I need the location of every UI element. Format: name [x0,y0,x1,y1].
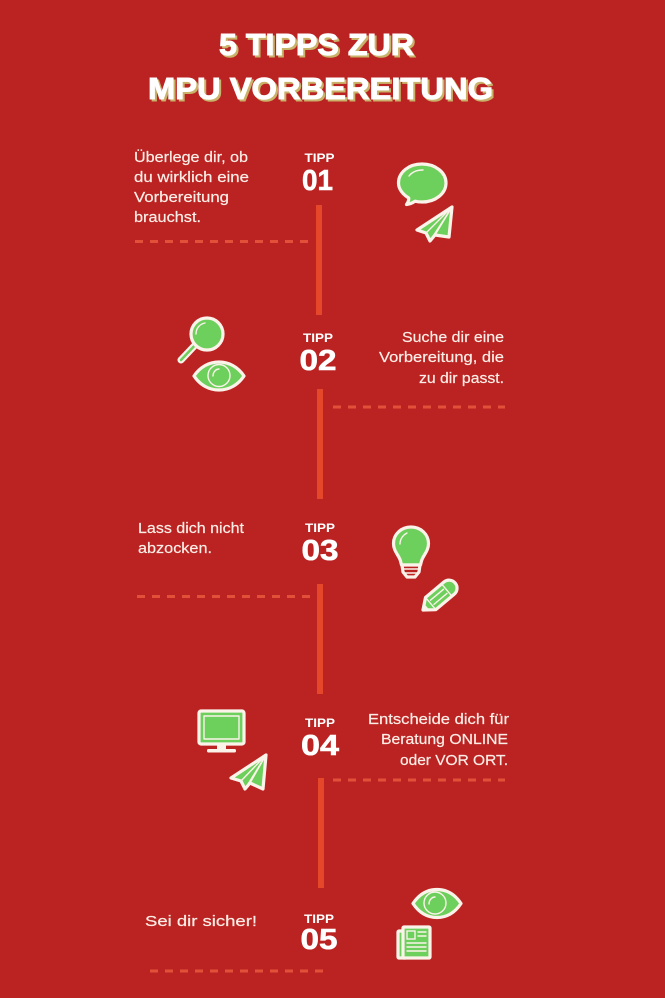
icon: newspaper [398,927,430,958]
text: tip 3: Lass dich nicht [138,520,245,537]
text: tip 5: Sei dir sicher! [145,913,257,930]
timeline segment 3 [317,584,323,694]
text: tip 2: Vorbereitung, die [379,349,504,366]
icon: pencil [418,577,460,616]
text: tip 3 [138,520,245,557]
dashed divider 2 [333,406,505,408]
title: 5 TIPPS ZUR [221,29,416,64]
label: tipp 03: 03 [302,535,338,567]
label: tipp 05: TIPP [304,912,334,926]
timeline segment 2 [317,389,323,499]
icon: eye [194,362,244,390]
dashed divider 4 [333,778,505,782]
text: tip 1 [134,148,249,226]
text: tip 4 [368,711,509,769]
title: MPU VORBEREITUNG [148,71,493,106]
timeline segment 1 [316,205,322,315]
text: tip 1: Überlege dir, ob [134,148,248,166]
text: tip 4: Entscheide dich für [368,711,509,728]
text: tip 1: Vorbereitung [134,189,229,206]
text: tip 2: Suche dir eine [402,329,504,346]
dashed divider 3 [137,595,310,598]
icon: monitor [199,711,244,752]
title: 5 TIPPS ZUR [219,27,414,62]
label: tipp 04 [301,716,339,762]
timeline segment 4 [318,778,324,888]
label: tipp 04: 04 [301,730,339,762]
label: tipp 05: 05 [300,924,338,956]
icon: magnifying glass [181,318,223,360]
label: tipp 03 [302,521,338,567]
dashed divider 5 [150,970,323,972]
text: tip 4: Beratung ONLINE [381,731,508,748]
label: tipp 01: 01 [302,165,333,197]
label: tipp 03: TIPP [305,521,335,535]
label: tipp 01: TIPP [304,151,334,165]
icon: paper plane [417,207,452,241]
icon: eye [413,890,461,918]
text: tip 2: zu dir passt. [419,370,504,387]
icon: paper plane [231,755,266,789]
label: tipp 02: 02 [300,345,336,377]
text: tip 1: du wirklich eine [134,169,249,186]
label: tipp 01 [302,151,334,197]
text: tip 4: oder VOR ORT. [400,752,508,769]
title: MPU VORBEREITUNG [150,73,495,108]
label: tipp 05 [300,912,338,956]
label: tipp 04: TIPP [305,716,335,730]
text: tip 3: abzocken. [138,540,212,557]
dashed divider 1 [135,240,308,243]
text: tip 1: brauchst. [134,209,201,226]
label: tipp 02 [300,331,336,377]
label: tipp 02: TIPP [303,331,333,345]
title [148,27,495,108]
icon: speech bubble [398,164,446,204]
icon: light bulb [394,527,428,577]
text: tip 2 [379,329,504,387]
